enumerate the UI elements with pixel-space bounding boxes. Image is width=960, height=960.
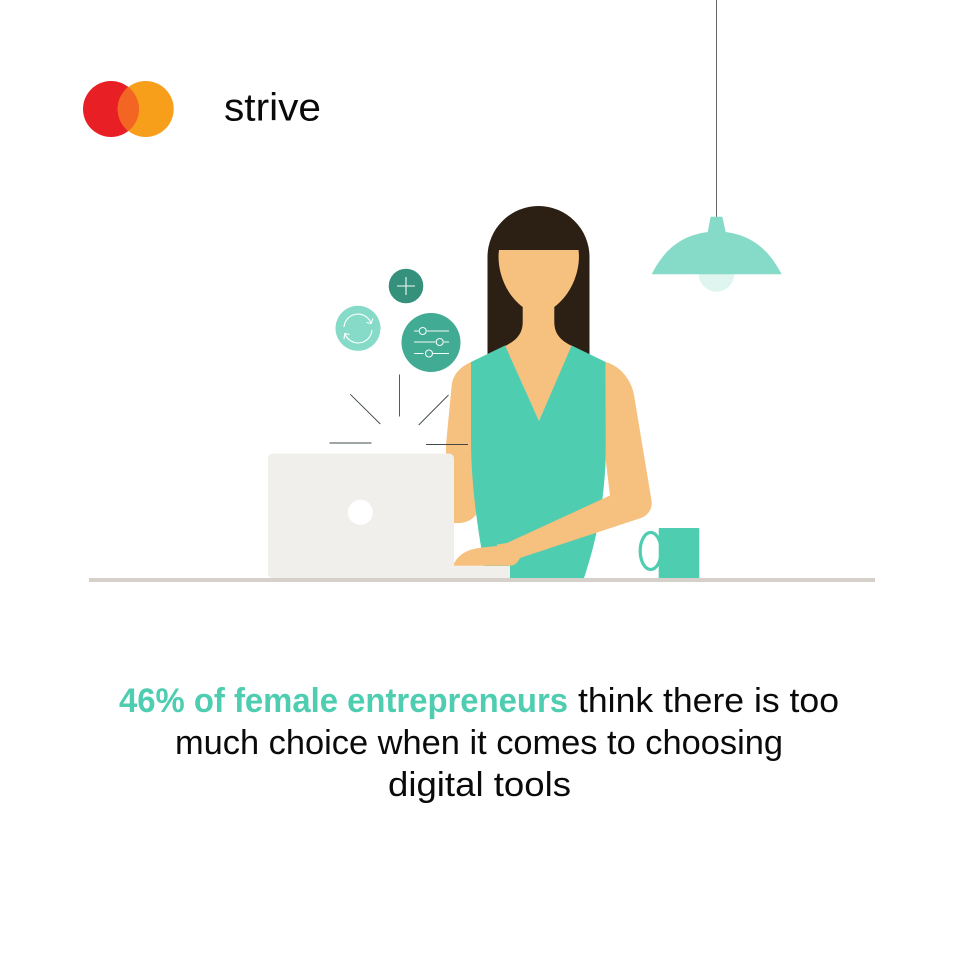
headline text: 46% of female entrepreneurs	[119, 682, 568, 720]
woman at desk	[446, 206, 652, 578]
desk	[89, 578, 875, 582]
headline text: much choice when it comes to choosing	[175, 724, 783, 762]
laptop	[268, 454, 510, 578]
headline text: think there is too	[578, 682, 839, 720]
right arm and hand	[453, 362, 652, 566]
headline text: digital tools	[388, 766, 571, 804]
left arm	[446, 362, 482, 523]
icon: sliders	[402, 313, 460, 372]
icon: refresh	[336, 306, 380, 351]
logo: overlapping circles	[83, 81, 174, 137]
headline text	[119, 682, 839, 804]
hair	[488, 206, 590, 356]
face and neck	[499, 250, 579, 421]
icon: plus	[389, 269, 423, 303]
lamp	[652, 0, 782, 292]
burst lines above laptop	[330, 374, 468, 444]
logo wordmark: strive: strive	[224, 86, 321, 130]
mug	[640, 528, 699, 579]
dress	[471, 346, 606, 578]
